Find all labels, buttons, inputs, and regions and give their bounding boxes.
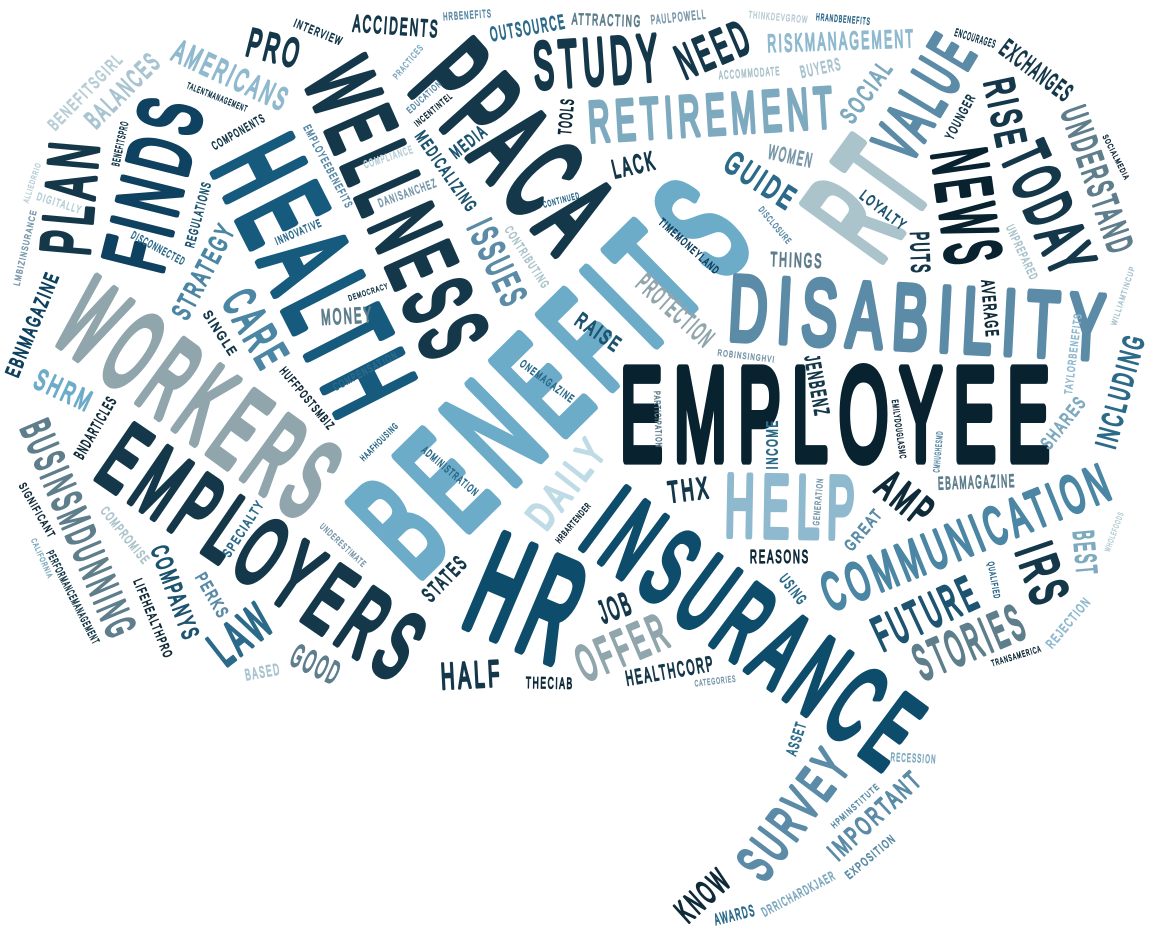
word: MEDIA: MEDIA bbox=[446, 121, 491, 162]
word: EMPLOYERS: EMPLOYERS bbox=[81, 405, 449, 704]
word: REGULATIONS: REGULATIONS bbox=[182, 180, 214, 249]
word: SIGNIFICANT: SIGNIFICANT bbox=[16, 481, 57, 541]
word: USING: USING bbox=[776, 571, 810, 609]
word: AWARDS: AWARDS bbox=[713, 902, 757, 929]
word: BNDARTICLES: BNDARTICLES bbox=[71, 393, 121, 462]
word: ACCOMMODATE: ACCOMMODATE bbox=[718, 64, 781, 82]
word cloud: speech bubble of employee benefits terms: BUYERS bbox=[798, 54, 843, 82]
word cloud: speech bubble of employee benefits terms: PUTS bbox=[904, 231, 936, 275]
word: EXPOSITION: EXPOSITION bbox=[842, 831, 899, 882]
word cloud: speech bubble of employee benefits terms: EBAMAGAZINE bbox=[938, 471, 1016, 493]
word cloud: speech bubble of employee benefits terms: GOOD bbox=[285, 637, 348, 692]
word: CMHUGHESMD: CMHUGHESMD bbox=[931, 430, 945, 473]
word: HEALTHCORP: HEALTHCORP bbox=[624, 652, 716, 691]
word: PPACA: PPACA bbox=[388, 18, 644, 281]
word: AVERAGE: AVERAGE bbox=[977, 279, 1002, 339]
word: STRATEGY: STRATEGY bbox=[166, 217, 241, 324]
word: TAYLORBENEFITS: TAYLORBENEFITS bbox=[1063, 312, 1085, 395]
word: DEMOCRACY: DEMOCRACY bbox=[347, 281, 390, 303]
word: KNOW: KNOW bbox=[668, 860, 738, 929]
word: EDUCATION: EDUCATION bbox=[405, 78, 444, 115]
word: THINGS: THINGS bbox=[770, 249, 824, 273]
word: COMPENSATION: COMPENSATION bbox=[331, 349, 400, 394]
word: HPMINSTITUTE: HPMINSTITUTE bbox=[829, 781, 882, 830]
word: DAILY: DAILY bbox=[518, 428, 617, 538]
word: LAW: LAW bbox=[199, 592, 286, 676]
word: REJECTION: REJECTION bbox=[1043, 594, 1094, 651]
word: SHRM: SHRM bbox=[29, 364, 99, 419]
word: HAAFHOUSING: HAAFHOUSING bbox=[358, 421, 401, 463]
word: IRS: IRS bbox=[1004, 535, 1081, 616]
word: HEALTH: HEALTH bbox=[187, 118, 444, 444]
word: WILLIAMTINCUP: WILLIAMTINCUP bbox=[1109, 265, 1137, 327]
word: PAULPOWELL: PAULPOWELL bbox=[650, 6, 707, 27]
word: MEDICALIZING: MEDICALIZING bbox=[411, 127, 481, 216]
word cloud: speech bubble of employee benefits terms: TOOLS bbox=[555, 97, 578, 135]
word: WHOLEFOODS: WHOLEFOODS bbox=[1103, 510, 1126, 553]
word cloud: speech bubble of employee benefits terms: HELP bbox=[724, 456, 863, 557]
word: REASONS: REASONS bbox=[750, 547, 810, 567]
word: EBNMAGAZINE: EBNMAGAZINE bbox=[2, 268, 64, 380]
word: GUIDE: GUIDE bbox=[718, 144, 805, 218]
word: HRANDBENEFITS: HRANDBENEFITS bbox=[816, 12, 871, 28]
word cloud: speech bubble of employee benefits terms: WOMEN bbox=[766, 141, 816, 173]
word: LIFEHEALTHPRO: LIFEHEALTHPRO bbox=[130, 576, 176, 661]
word: PRO: PRO bbox=[242, 21, 307, 77]
word: HUFFPOSTSMBIZ: HUFFPOSTSMBIZ bbox=[277, 364, 338, 433]
word: ATTRACTING: ATTRACTING bbox=[571, 11, 642, 31]
word: SHARES: SHARES bbox=[1037, 392, 1091, 453]
word cloud: speech bubble of employee benefits terms: ACCIDENTS bbox=[352, 10, 440, 43]
word: RAISE: RAISE bbox=[571, 309, 626, 357]
word cloud: speech bubble of employee benefits terms: BUSINSMDUNNING bbox=[12, 413, 146, 647]
word: PARTICIPATION: PARTICIPATION bbox=[652, 391, 664, 448]
word: COMPROMISE: COMPROMISE bbox=[98, 504, 153, 567]
word: EMILYDOUGLASMC: EMILYDOUGLASMC bbox=[890, 399, 908, 460]
word: LOYALTY: LOYALTY bbox=[856, 187, 910, 235]
word: WELLNESS: WELLNESS bbox=[285, 46, 511, 379]
word: HRBENEFITS: HRBENEFITS bbox=[443, 8, 492, 23]
word: DISCONNECTED: DISCONNECTED bbox=[129, 230, 187, 268]
word: TIMEMONEYLAND: TIMEMONEYLAND bbox=[656, 216, 722, 277]
word: GENERATION: GENERATION bbox=[811, 477, 825, 526]
word: COMPANYS: COMPANYS bbox=[145, 542, 205, 645]
word: OFFER: OFFER bbox=[567, 602, 679, 692]
word: FUTURE: FUTURE bbox=[865, 566, 988, 661]
word: UNDERESTIMATE: UNDERESTIMATE bbox=[318, 521, 369, 569]
word: ISSUES: ISSUES bbox=[459, 213, 536, 315]
word: BENEFITSGIRL: BENEFITSGIRL bbox=[44, 49, 127, 134]
word cloud: speech bubble of employee benefits terms: RISKMANAGEMENT bbox=[767, 25, 916, 58]
word: THINKDEVGROW: THINKDEVGROW bbox=[748, 10, 809, 26]
word: UNPREPARED: UNPREPARED bbox=[1003, 222, 1041, 283]
word: WORKERS: WORKERS bbox=[36, 256, 368, 546]
word: DIGITALLY: DIGITALLY bbox=[35, 191, 83, 217]
word: GREAT: GREAT bbox=[842, 505, 887, 555]
word: SOCIALMEDIA: SOCIALMEDIA bbox=[1101, 133, 1131, 182]
word cloud: speech bubble of employee benefits terms: PROTECTION bbox=[631, 268, 721, 354]
word: ROBINSINGHVI: ROBINSINGHVI bbox=[717, 348, 776, 365]
word: THECIAB: THECIAB bbox=[526, 675, 574, 693]
word: ONEMAGAZINE: ONEMAGAZINE bbox=[517, 358, 577, 406]
word: DISCLOSURE: DISCLOSURE bbox=[757, 205, 794, 246]
word: TALENTMANAGEMENT: TALENTMANAGEMENT bbox=[185, 80, 249, 114]
word: EMPLOYEEBENEFITS: EMPLOYEEBENEFITS bbox=[300, 123, 355, 211]
word: CONTRIBUTING: CONTRIBUTING bbox=[502, 224, 553, 292]
word: YOUNGER: YOUNGER bbox=[942, 91, 979, 142]
word: HALF: HALF bbox=[440, 653, 504, 697]
word: ADMINISTRATION: ADMINISTRATION bbox=[419, 445, 481, 499]
word: LACK: LACK bbox=[609, 145, 660, 184]
word: STATES: STATES bbox=[418, 551, 473, 606]
word: QUALIFIED: QUALIFIED bbox=[986, 561, 1002, 600]
word: PERKS: PERKS bbox=[191, 569, 233, 622]
word: ASSET: ASSET bbox=[783, 719, 810, 758]
word: JENBENZ: JENBENZ bbox=[800, 354, 833, 419]
word: DANISANCHEZ: DANISANCHEZ bbox=[376, 176, 439, 210]
word cloud: speech bubble of employee benefits terms: STUDY bbox=[531, 20, 666, 103]
word cloud: speech bubble of employee benefits terms: BENEFITSPRO bbox=[110, 120, 131, 167]
word: MONEY: MONEY bbox=[320, 302, 374, 330]
word: AMERICANS: AMERICANS bbox=[167, 33, 296, 118]
word cloud: speech bubble of employee benefits terms: BEST bbox=[1066, 529, 1102, 578]
word: INCENTINTEL: INCENTINTEL bbox=[412, 91, 455, 129]
word: CATEGORIES: CATEGORIES bbox=[694, 673, 737, 689]
word: JOB: JOB bbox=[593, 585, 638, 630]
word: TRANSAMERICA: TRANSAMERICA bbox=[990, 644, 1043, 668]
word: LMBIZINSURANCE: LMBIZINSURANCE bbox=[12, 208, 39, 287]
word: CARE: CARE bbox=[213, 280, 300, 380]
word: COMPLIANCE: COMPLIANCE bbox=[362, 144, 415, 171]
word: PLAN: PLAN bbox=[27, 133, 114, 258]
word: COMPONENTS: COMPONENTS bbox=[209, 111, 268, 153]
word: RT: RT bbox=[776, 107, 963, 283]
word: RETIREMENT: RETIREMENT bbox=[586, 75, 840, 155]
word: AMP: AMP bbox=[868, 461, 946, 537]
word cloud: speech bubble of employee benefits terms: ENCOURAGES bbox=[953, 27, 998, 51]
word: THX: THX bbox=[666, 472, 713, 510]
word: PERFORMANCEMANAGEMENT: PERFORMANCEMANAGEMENT bbox=[44, 549, 102, 647]
word: INNOVATIVE: INNOVATIVE bbox=[273, 217, 324, 248]
word: RECESSION: RECESSION bbox=[890, 750, 937, 766]
word: INCOME: INCOME bbox=[764, 419, 781, 469]
word: INTERVIEW: INTERVIEW bbox=[292, 16, 345, 49]
word: SURVEY: SURVEY bbox=[726, 736, 864, 891]
word: RISE: RISE bbox=[975, 74, 1036, 154]
word: SPECIALTY: SPECIALTY bbox=[219, 497, 267, 560]
word: ALLIEDRRIO: ALLIEDRRIO bbox=[22, 161, 43, 204]
word: IMPORTANT: IMPORTANT bbox=[821, 764, 928, 866]
word cloud: speech bubble of employee benefits terms: NEWS bbox=[915, 143, 1017, 274]
word: CONTINUED: CONTINUED bbox=[542, 190, 581, 210]
word: HR: HR bbox=[448, 505, 616, 697]
word: CALIFORNIA: CALIFORNIA bbox=[29, 537, 55, 580]
word: PRACTICES: PRACTICES bbox=[391, 42, 426, 81]
word: SINGLE: SINGLE bbox=[200, 308, 241, 359]
word: BASED: BASED bbox=[244, 661, 282, 684]
word: SOCIAL: SOCIAL bbox=[835, 54, 899, 128]
word: HRBARTENDER: HRBARTENDER bbox=[553, 500, 593, 545]
word: DRRICHARDKJAER: DRRICHARDKJAER bbox=[759, 868, 838, 919]
